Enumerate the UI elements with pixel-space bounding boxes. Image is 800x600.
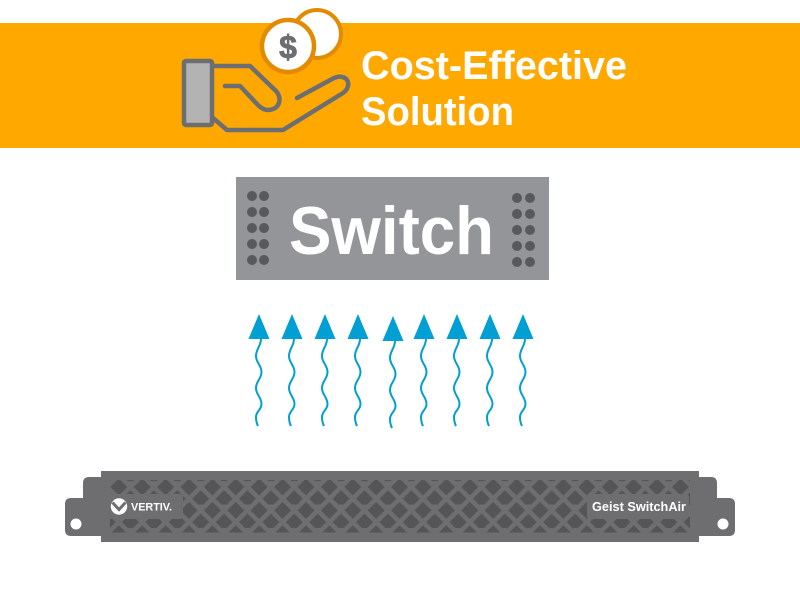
airflow arrows <box>248 314 534 428</box>
arrow 6 <box>414 314 434 426</box>
icon: hand outline <box>213 66 348 130</box>
icon: back coin <box>293 10 341 58</box>
icon: Vertiv logo <box>111 498 127 515</box>
device: Geist SwitchAir panel <box>65 471 735 542</box>
product name plate: Geist SwitchAir <box>592 499 686 514</box>
arrow 9 <box>512 314 534 426</box>
Vertiv logo plate <box>104 494 183 519</box>
heading: Cost-Effective <box>361 44 627 88</box>
panel: switch <box>236 177 549 280</box>
arrow 8 <box>480 314 500 426</box>
arrow 3 <box>314 314 336 426</box>
arrow 1 <box>248 314 270 426</box>
icon: front coin with dollar sign: $ <box>279 29 297 65</box>
mounting holes <box>70 518 728 530</box>
device ears and body <box>65 471 735 542</box>
arrow 2 <box>282 314 302 426</box>
heading <box>361 44 627 134</box>
mesh grille <box>110 480 690 532</box>
arrow 5 <box>382 316 404 428</box>
switch label: Switch <box>289 193 494 269</box>
vent dots left <box>247 191 269 265</box>
icon: hand holding coins <box>184 10 348 130</box>
product name plate <box>587 494 689 519</box>
icon: sleeve cuff <box>184 61 212 125</box>
arrow 4 <box>348 314 368 426</box>
icon: front coin with dollar sign <box>262 20 314 72</box>
banner: cost-effective solution <box>0 10 800 148</box>
Vertiv logo plate: VERTIV. <box>131 502 172 514</box>
arrow 7 <box>446 314 468 426</box>
vent dots right <box>512 193 535 267</box>
heading: Solution <box>361 90 514 134</box>
